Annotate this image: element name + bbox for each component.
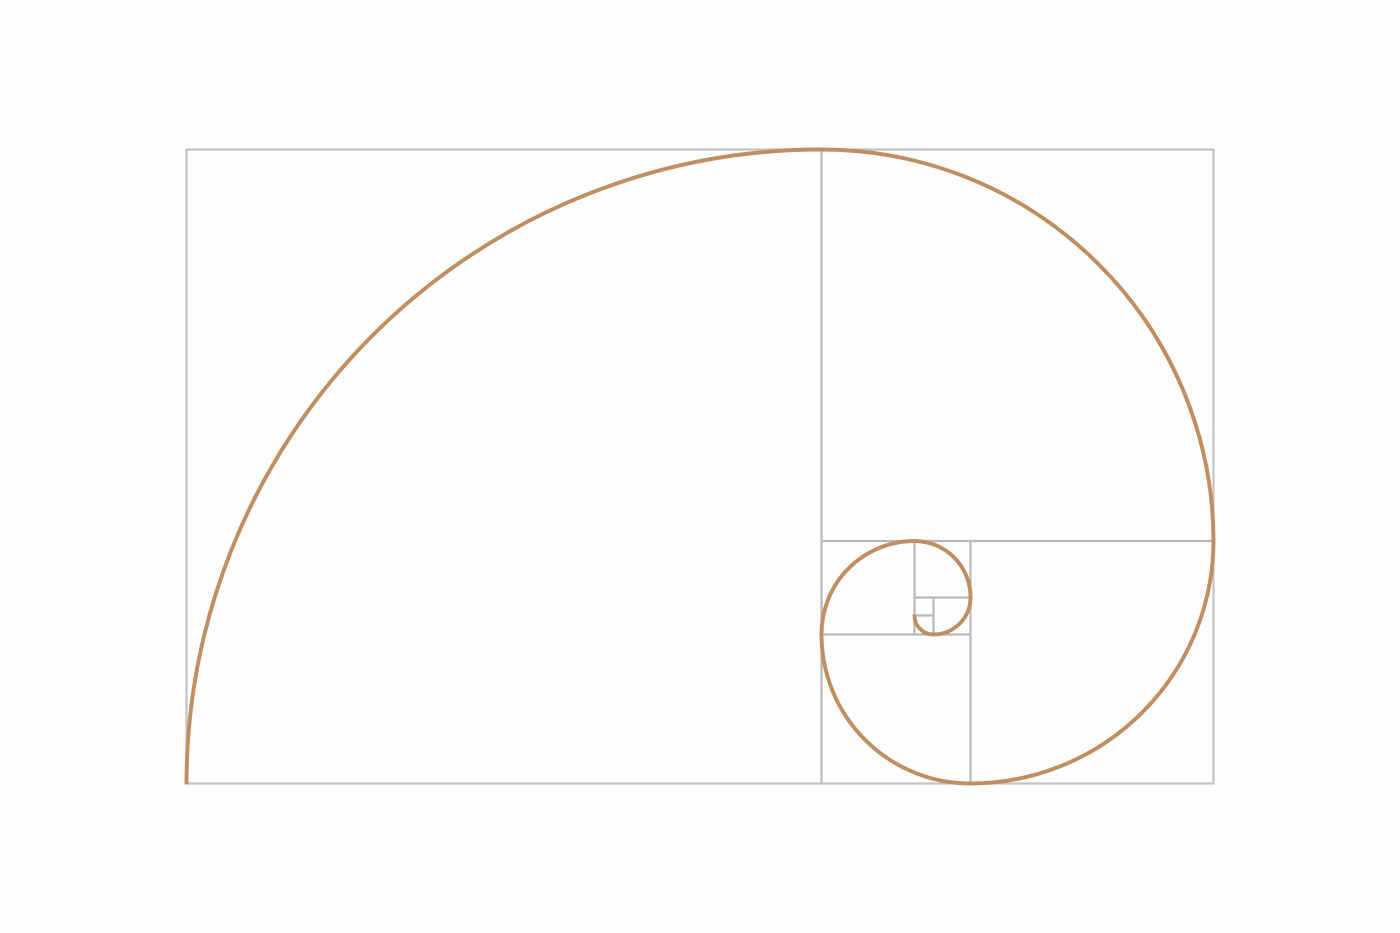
square subdivision grid [822,150,1214,784]
golden spiral curve [186,150,1214,784]
outer golden rectangle [186,150,1214,784]
